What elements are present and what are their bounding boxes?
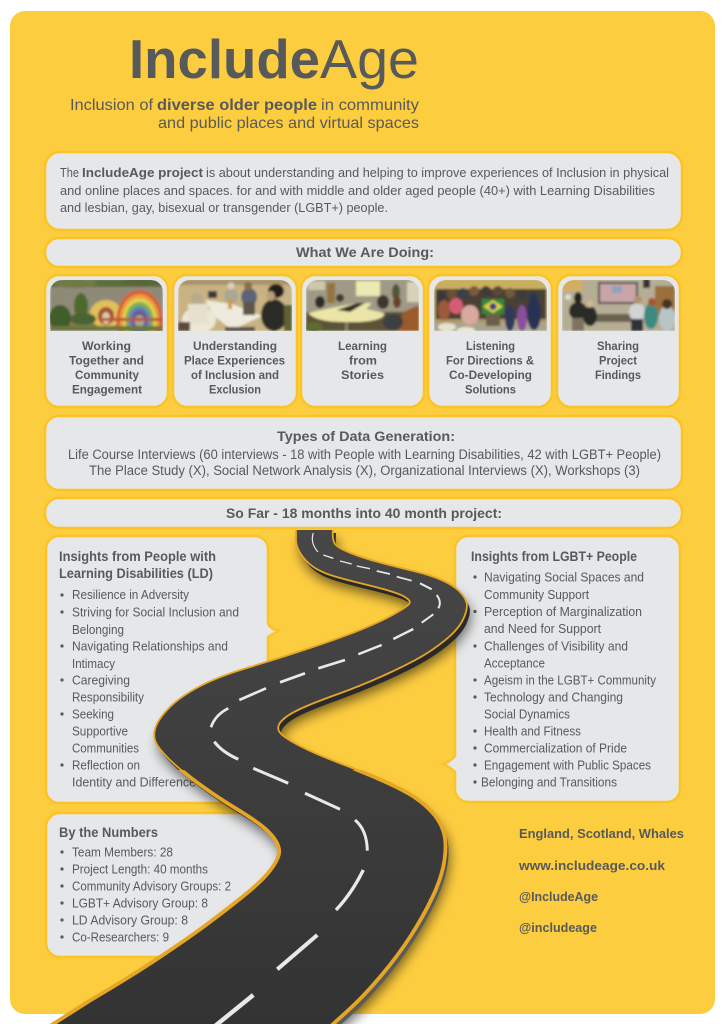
- bullet list: Ageism in the LGBT+ Community: [484, 674, 657, 688]
- bullet list: Acceptance: [484, 656, 545, 670]
- intro line 1: is about understanding and helping to improve experiences of Inclusion in physical: [206, 165, 669, 180]
- photo: rainbow mural: [50, 280, 163, 331]
- card: listening for directions: [428, 275, 552, 407]
- heading: Learning Disabilities (LD): [59, 566, 213, 581]
- panel: so far banner: [45, 498, 682, 528]
- bullet list: Navigating Relationships and: [72, 640, 228, 654]
- card label: Listening: [466, 339, 515, 353]
- card label: Project: [599, 354, 637, 368]
- photo: group with flag: [434, 279, 547, 333]
- panel: insights from people with learning disabilities: [46, 536, 280, 803]
- bullet list: Project Length: 40 months: [72, 862, 208, 876]
- panel: by the numbers: [46, 813, 286, 957]
- card label: Understanding: [193, 339, 277, 353]
- card label: Community: [75, 368, 139, 382]
- subtitle line 2: and public places and virtual spaces: [158, 115, 419, 132]
- bullet list: Technology and Changing: [484, 690, 623, 704]
- card label: [184, 339, 285, 396]
- bullet list: Responsibility: [72, 690, 145, 704]
- title block: [70, 28, 419, 132]
- heading: So Far - 18 months into 40 month project:: [226, 505, 502, 521]
- winding road illustration: [50, 528, 471, 1024]
- contact details: @includeage: [519, 920, 597, 935]
- heading: Insights from People with: [59, 549, 216, 564]
- subtitle line 1: in community: [321, 97, 419, 114]
- card label: [69, 339, 144, 396]
- card label: Together and: [69, 354, 144, 368]
- heading: Insights from LGBT+ People: [471, 549, 637, 564]
- card: sharing project findings: [557, 275, 680, 407]
- panel: what we are doing: [45, 238, 682, 267]
- data line 1: Life Course Interviews (60 interviews - 18 with People with Learning Disabilities, 42 with LGBT+ People): [68, 447, 661, 462]
- photo: table meeting: [178, 279, 292, 333]
- card label: [595, 339, 641, 382]
- bullet list: Communities: [72, 742, 139, 756]
- subtitle line 1: diverse older people: [157, 97, 317, 114]
- bullet list: Co-Researchers: 9: [72, 930, 169, 944]
- bullet list: Health and Fitness: [484, 724, 581, 738]
- bullet list: Engagement with Public Spaces: [484, 758, 651, 772]
- panel: types of data generation: [45, 416, 682, 490]
- card label: Working: [82, 339, 131, 353]
- bullet list: Community Support: [484, 588, 589, 602]
- card label: Findings: [595, 368, 641, 382]
- intro line 3: and lesbian, gay, bisexual or transgender (LGBT+) people.: [60, 200, 388, 215]
- bullet list: LD Advisory Group: 8: [72, 914, 188, 928]
- card: learning from stories: [301, 275, 424, 407]
- intro line 1: The: [60, 165, 79, 180]
- card label: Sharing: [597, 339, 639, 353]
- card label: For Directions &: [446, 354, 534, 368]
- bullet list: [60, 846, 231, 944]
- photo: team in office: [562, 279, 675, 331]
- bullet list: Belonging: [72, 623, 124, 637]
- bullet list: Team Members: 28: [72, 846, 173, 860]
- card: understanding place experiences: [173, 275, 297, 407]
- contact details: England, Scotland, Whales: [519, 826, 684, 841]
- card label: Co-Developing: [449, 368, 532, 382]
- subtitle line 1: Inclusion of: [70, 97, 154, 114]
- bullet list: Belonging and Transitions: [481, 776, 617, 790]
- bullet list: Intimacy: [72, 657, 116, 671]
- bullet list: Striving for Social Inclusion and: [72, 606, 239, 620]
- bullet list: and Need for Support: [484, 622, 602, 636]
- bullet list: Identity and Difference: [72, 776, 196, 790]
- card label: from: [349, 354, 377, 368]
- title: Include: [129, 28, 320, 90]
- bullet list: [473, 570, 657, 790]
- card label: Engagement: [72, 382, 142, 396]
- bullet list: Navigating Social Spaces and: [484, 570, 644, 584]
- panel: project intro: [45, 152, 682, 230]
- heading: What We Are Doing:: [296, 245, 434, 260]
- bullet list: Perception of Marginalization: [484, 605, 642, 619]
- contact details: [518, 826, 684, 935]
- bullet list: Challenges of Visibility and: [484, 640, 628, 654]
- card: working together: [45, 275, 168, 407]
- road centre dashes: [211, 533, 440, 1024]
- card label: Exclusion: [209, 382, 261, 396]
- card label: Place Experiences: [184, 354, 285, 368]
- card label: Solutions: [465, 382, 516, 396]
- bullet list: Reflection on: [72, 758, 140, 772]
- bullet list: Commercialization of Pride: [484, 742, 627, 756]
- contact details: www.includeage.co.uk: [518, 858, 666, 873]
- bullet list: Seeking: [72, 708, 114, 722]
- card label: of Inclusion and: [191, 368, 279, 382]
- card label: Stories: [341, 368, 384, 382]
- bullet list: Community Advisory Groups: 2: [72, 880, 231, 894]
- heading: Types of Data Generation:: [277, 428, 455, 444]
- card label: [338, 339, 387, 382]
- subtitle line 1: [70, 97, 419, 114]
- heading: By the Numbers: [59, 825, 158, 840]
- bullet list: Supportive: [72, 724, 128, 738]
- intro line 2: and online places and spaces. for and with middle and older aged people (40+) with Learning Disabilities: [60, 183, 655, 198]
- bullet list: Caregiving: [72, 674, 130, 688]
- card label: Learning: [338, 339, 387, 353]
- heading: [59, 549, 216, 581]
- panel: insights from LGBT+ people: [443, 536, 680, 802]
- contact details: @IncludeAge: [519, 889, 598, 904]
- intro line 1: IncludeAge project: [82, 165, 204, 180]
- bullet list: [60, 588, 239, 790]
- title second part: Age: [320, 28, 419, 90]
- card label: [446, 339, 534, 396]
- photo: classroom: [305, 279, 419, 332]
- data line 2: The Place Study (X), Social Network Analysis (X), Organizational Interviews (X), Workshops (3): [89, 463, 640, 478]
- bullet list: Resilience in Adversity: [72, 588, 190, 602]
- bullet list: Social Dynamics: [484, 708, 570, 722]
- bullet list: LGBT+ Advisory Group: 8: [72, 896, 208, 910]
